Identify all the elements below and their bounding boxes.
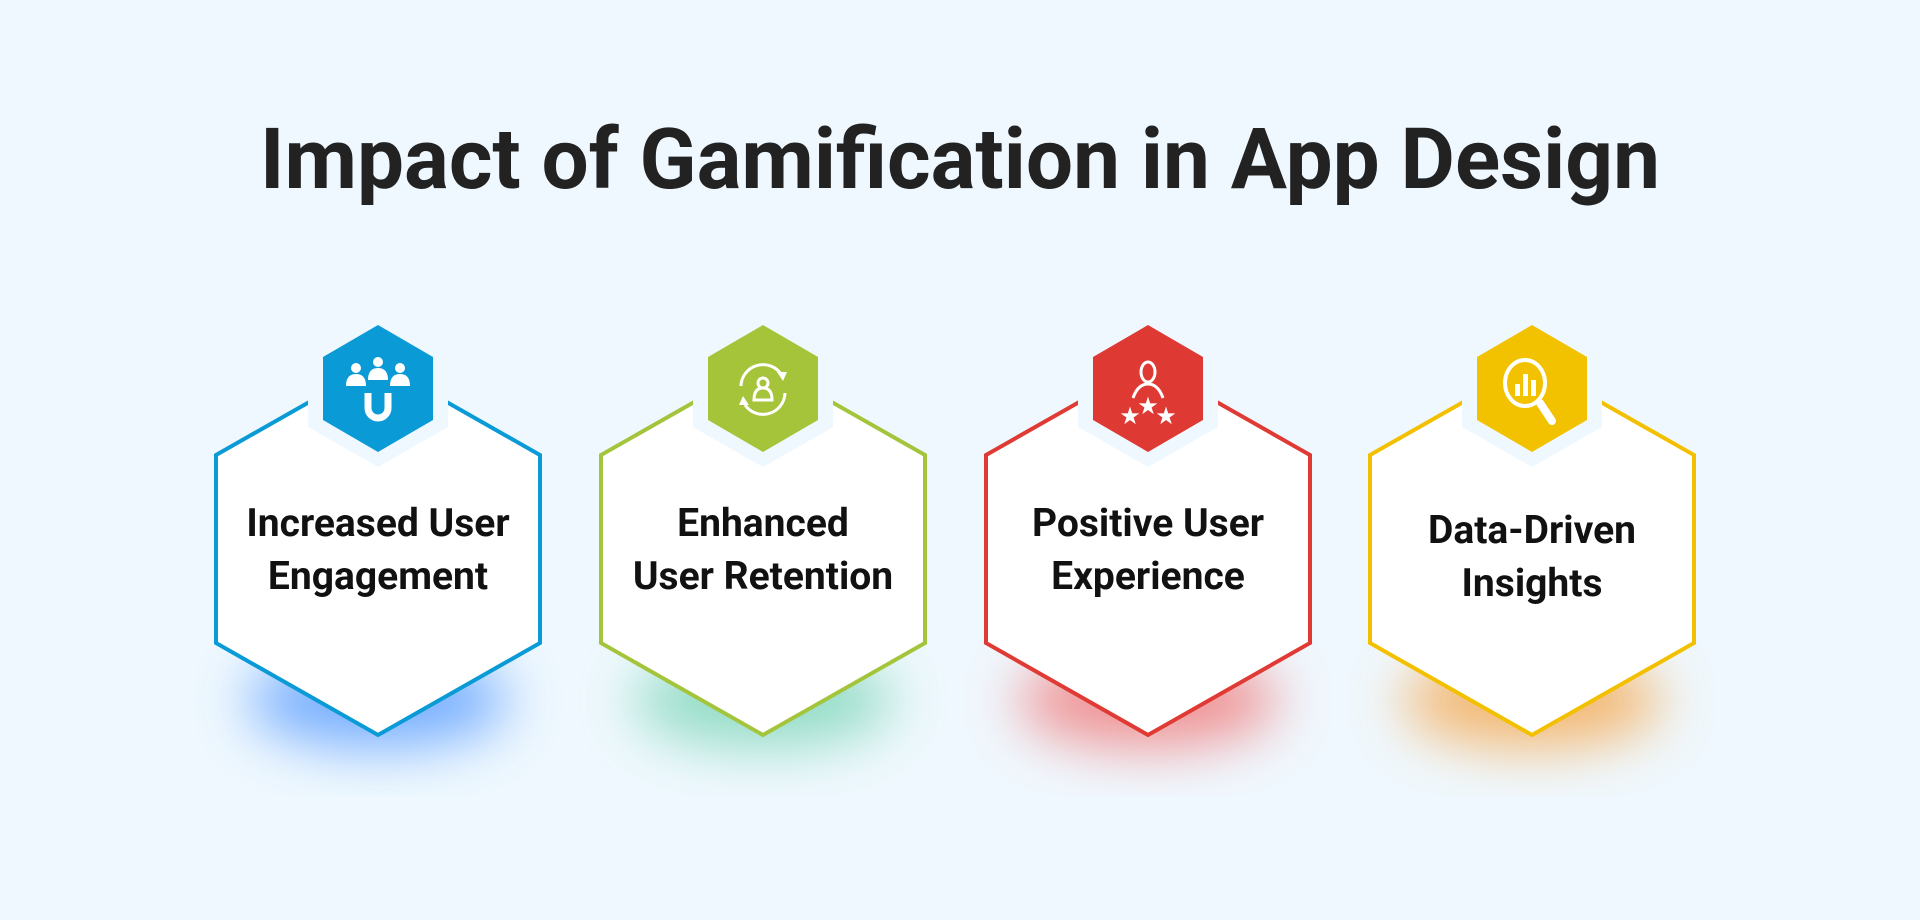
text: Positive User	[1032, 500, 1264, 546]
icon: user stars: ★	[1155, 402, 1177, 430]
icon: user stars	[1093, 325, 1203, 452]
panel: increased user engagement: Engagement	[268, 553, 488, 599]
glow	[1018, 652, 1278, 748]
panel: increased user engagement	[216, 313, 540, 748]
icon: magnifier chart	[1477, 325, 1587, 452]
panel: enhanced user retention	[601, 313, 925, 748]
text: Increased User	[246, 500, 510, 546]
panel: enhanced user retention: User Retention	[633, 553, 893, 599]
glow	[248, 652, 508, 748]
title: Impact of Gamification in App Design	[260, 110, 1660, 209]
glow	[633, 652, 893, 748]
text: Enhanced	[677, 500, 849, 546]
panel: positive user experience: Experience	[1051, 553, 1245, 599]
icon: users magnet	[323, 325, 433, 452]
text: Data-Driven	[1428, 507, 1636, 553]
panel: positive user experience	[986, 313, 1310, 748]
panel: data-driven insights: Insights	[1462, 560, 1602, 606]
icon: user stars: ★	[1137, 392, 1159, 420]
icon: user stars: ★	[1119, 402, 1141, 430]
glow	[1402, 652, 1662, 748]
icon: retention cycle	[708, 325, 818, 452]
panel: data-driven insights	[1370, 313, 1694, 748]
